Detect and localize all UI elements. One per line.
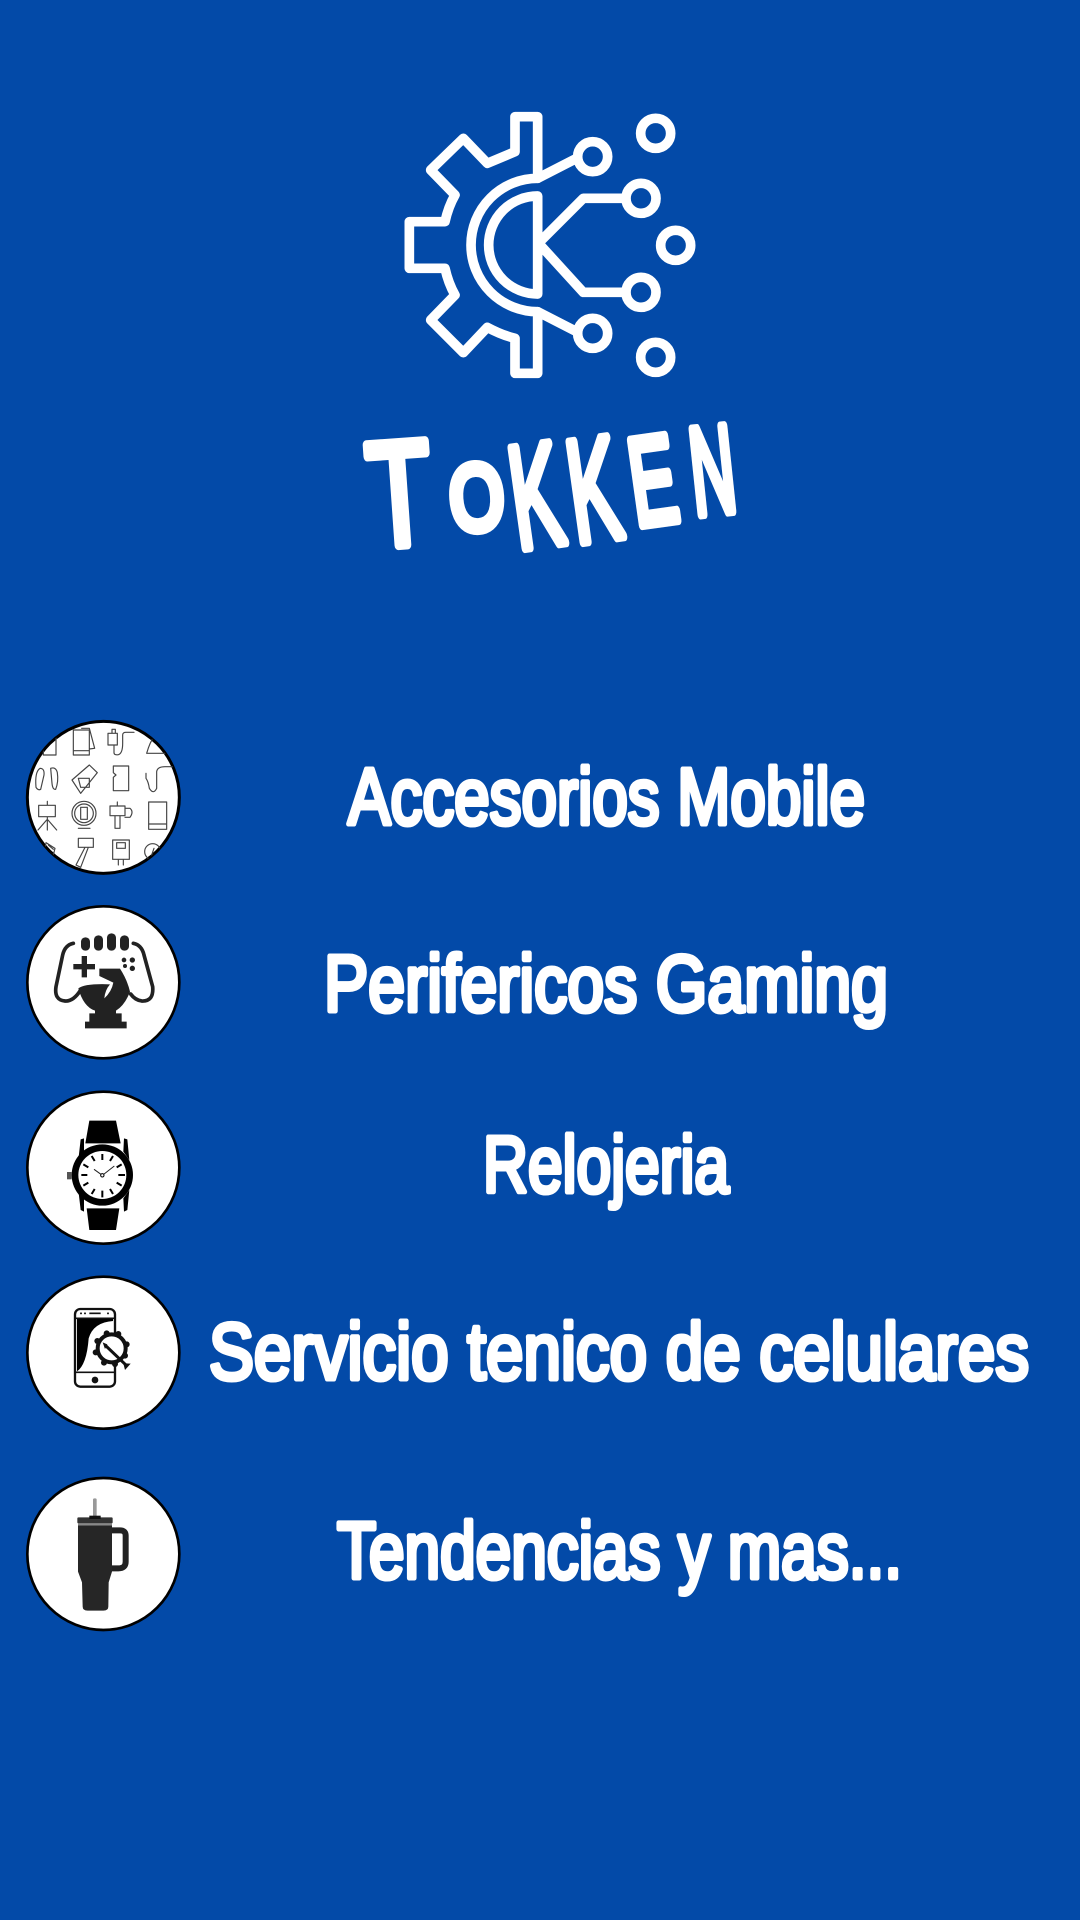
title: TOKKEN: T xyxy=(362,410,437,579)
title: TOKKEN: N xyxy=(683,400,742,542)
logo: gear with circuit K xyxy=(409,117,691,373)
title: TOKKEN xyxy=(362,400,742,580)
label: Accesorios Mobile xyxy=(348,752,865,841)
row: Servicio tenico de celulares xyxy=(27,1277,1029,1429)
icon: tumbler with straw xyxy=(27,1478,179,1630)
label: Perifericos Gaming xyxy=(324,939,888,1028)
row: Perifericos Gaming xyxy=(27,906,888,1058)
icon: wristwatch xyxy=(27,1092,179,1244)
row: Relojeria xyxy=(27,1092,729,1244)
row: Accesorios Mobile xyxy=(27,721,865,873)
title: TOKKEN: K xyxy=(558,405,630,574)
icon: phone repair xyxy=(27,1277,179,1429)
title: TOKKEN: O xyxy=(446,445,507,551)
icon: mobile accessories pattern xyxy=(27,721,179,873)
icon: gamepad with hand xyxy=(27,906,179,1058)
label: Relojeria xyxy=(483,1120,729,1209)
title: TOKKEN: K xyxy=(500,411,572,580)
title: TOKKEN: E xyxy=(621,410,685,553)
label: Tendencias y mas... xyxy=(337,1506,902,1595)
row: Tendencias y mas... xyxy=(27,1478,902,1630)
